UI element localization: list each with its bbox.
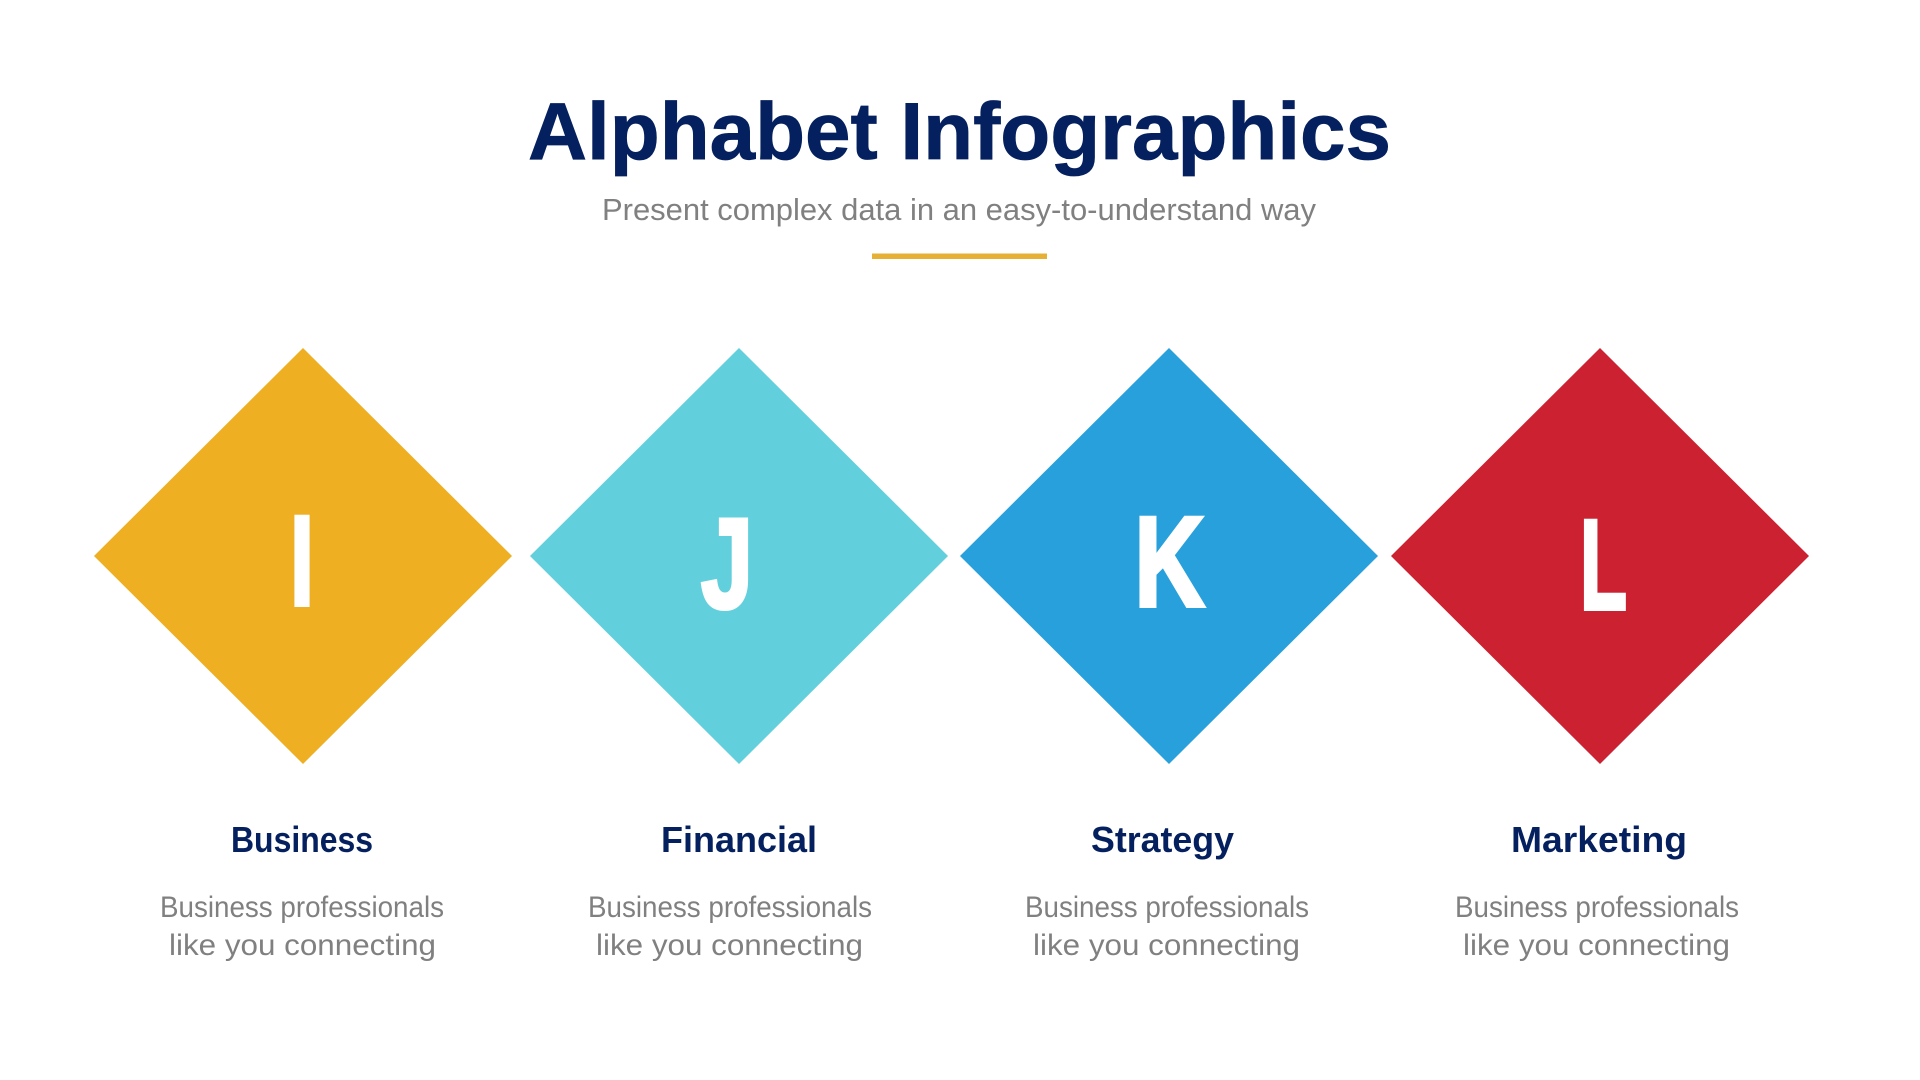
letter L: L: [1580, 494, 1627, 637]
panel: J Financial: [530, 348, 948, 962]
diamond I: [94, 348, 512, 764]
description: Business professionals: [588, 891, 872, 924]
panel: K Strategy: [960, 348, 1378, 962]
diamond J: [530, 348, 948, 764]
panel: I Business: [94, 348, 512, 962]
description: Business professionals: [160, 891, 444, 924]
description: Business professionals: [1025, 891, 1309, 924]
description: [160, 891, 444, 962]
heading Financial: Financial: [661, 819, 817, 860]
diamond K: [960, 348, 1378, 764]
letter K: K: [1134, 491, 1204, 634]
description: like you connecting: [1033, 929, 1300, 962]
panel: L Marketing: [1391, 348, 1809, 962]
letter J: J: [701, 493, 753, 636]
description: like you connecting: [596, 929, 863, 962]
title: Alphabet Infographics: [528, 87, 1391, 177]
heading Marketing: Marketing: [1511, 819, 1687, 860]
description: [588, 891, 872, 962]
description: [1025, 891, 1309, 962]
diamond L: [1391, 348, 1809, 764]
description: like you connecting: [1463, 929, 1730, 962]
accent rule: [872, 254, 1047, 259]
letter I: I: [290, 490, 314, 633]
description: like you connecting: [169, 929, 436, 962]
heading Business: Business: [231, 819, 373, 860]
heading Strategy: Strategy: [1091, 819, 1234, 860]
description: [1455, 891, 1739, 962]
description: Business professionals: [1455, 891, 1739, 924]
subtitle: Present complex data in an easy-to-understand way: [602, 192, 1316, 227]
